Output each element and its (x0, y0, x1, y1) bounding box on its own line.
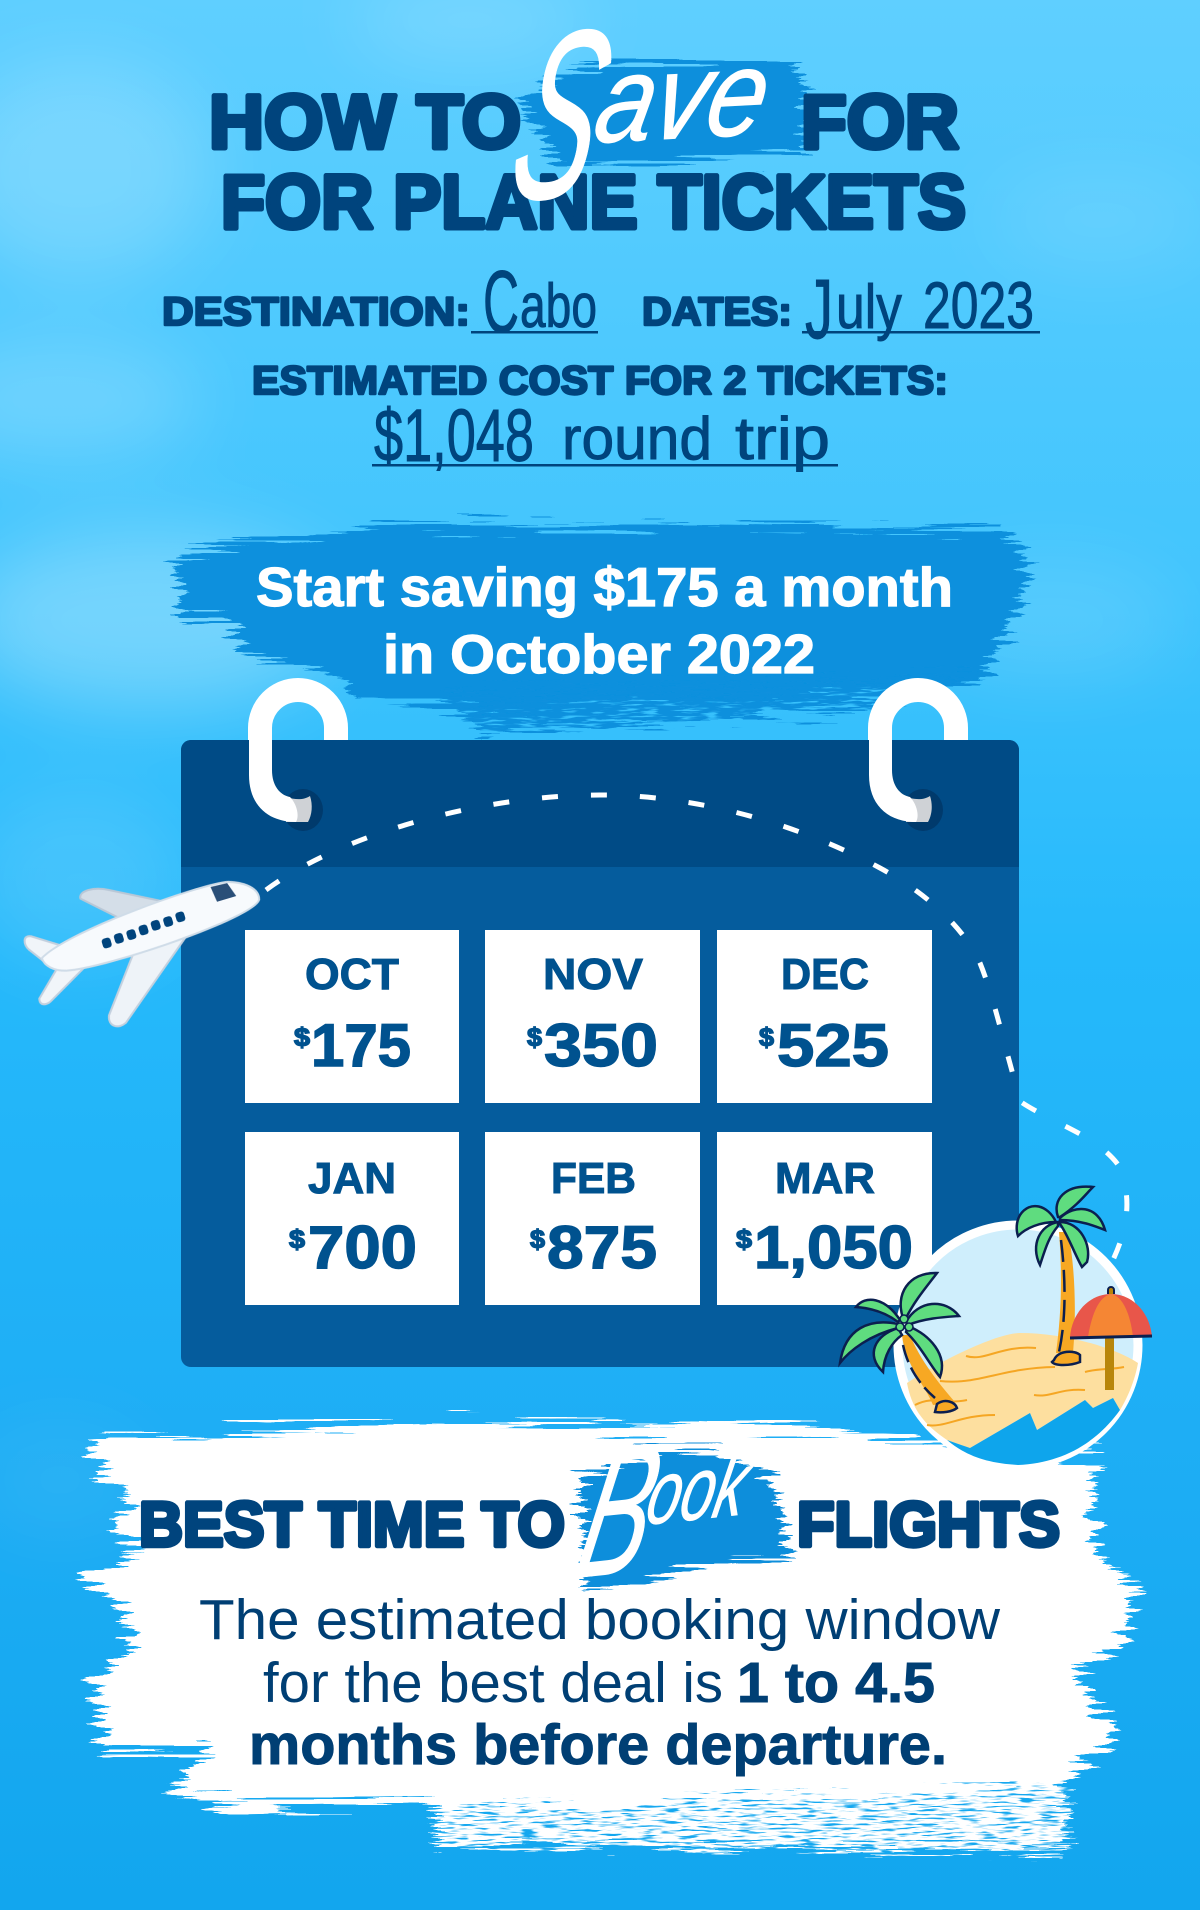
calendar header (181, 740, 1019, 867)
card: MAR: 1,050 (754, 1214, 913, 1281)
card: DEC: $ (759, 1022, 775, 1052)
fuselage (36, 873, 265, 980)
palm right (1017, 1187, 1105, 1365)
ring left (249, 735, 323, 831)
card: MAR: MAR (775, 1154, 875, 1203)
dates value: 2023 (923, 268, 1034, 342)
body text line 3 bold: months before departure. (249, 1713, 947, 1777)
destination value: abo (520, 272, 597, 341)
far wing (79, 871, 164, 929)
title (209, 0, 966, 252)
beach circle (898, 1225, 1138, 1465)
body text line 2 regular: for the best deal is (263, 1651, 723, 1715)
title line 1 left: HOW TO (209, 80, 521, 165)
dates value: uly (836, 273, 902, 342)
card: MAR (717, 1132, 932, 1305)
card: NOV (485, 930, 700, 1103)
white brush stroke (84, 1423, 1140, 1807)
dates value: J (805, 262, 833, 356)
icon: airplane (13, 844, 283, 1046)
sand ripples (915, 1348, 1124, 1425)
near wing (91, 929, 211, 1028)
card: DEC: DEC (781, 950, 869, 999)
umbrella (1070, 1287, 1152, 1390)
card: OCT: OCT (305, 950, 399, 999)
card: FEB: FEB (551, 1154, 636, 1203)
heading right: FLIGHTS (797, 1490, 1060, 1560)
card: FEB (485, 1132, 700, 1305)
cost underline (372, 464, 838, 466)
script word Book: B (563, 1402, 677, 1618)
heading left: BEST TIME TO (139, 1490, 565, 1560)
trip details (162, 252, 1040, 477)
destination value: C (483, 252, 519, 351)
destination label: DESTINATION: (162, 290, 470, 334)
water (947, 1398, 1120, 1465)
flight path arrow (266, 795, 1127, 1262)
brush stroke behind Book (580, 1447, 790, 1593)
script word Book: ook (639, 1433, 761, 1544)
cost value: round (562, 405, 712, 472)
title line 1 right: FOR (801, 80, 959, 165)
script word Save: ave (586, 23, 782, 169)
card: FEB: 875 (547, 1214, 657, 1281)
card: DEC: 525 (777, 1012, 889, 1079)
card: JAN: $ (289, 1224, 306, 1254)
cost label: ESTIMATED COST FOR 2 TICKETS: (252, 359, 948, 403)
card: OCT (245, 930, 459, 1103)
dry brush lower streaks (435, 1770, 1070, 1852)
card: MAR: $ (736, 1224, 753, 1254)
brush stroke behind Save (515, 60, 805, 165)
calendar body (181, 740, 1019, 1367)
card: DEC (717, 930, 932, 1103)
brush stroke banner (172, 524, 1028, 715)
cost value: trip (735, 405, 830, 472)
cost value: $1,048 (374, 394, 534, 477)
card: NOV: 350 (544, 1012, 658, 1079)
card: OCT: 175 (311, 1012, 411, 1079)
ring right (869, 735, 943, 831)
title line 2: FOR PLANE TICKETS (221, 160, 966, 245)
card: JAN: JAN (308, 1154, 396, 1203)
dates underline (802, 331, 1040, 334)
palm left (840, 1273, 959, 1412)
panel: best time to book (84, 1392, 1140, 1852)
dates label: DATES: (642, 290, 792, 334)
body text line 1: The estimated booking window (199, 1588, 1001, 1652)
panel: start saving banner (172, 524, 1028, 735)
card: NOV: NOV (543, 950, 644, 999)
card: OCT: $ (294, 1022, 311, 1052)
icon: beach scene (840, 1187, 1152, 1465)
ring backs (260, 690, 956, 745)
body text line 2 bold: 1 to 4.5 (737, 1651, 935, 1715)
cockpit (211, 881, 236, 902)
card: FEB: $ (530, 1224, 546, 1254)
banner text line 1: Start saving $175 a month (256, 556, 953, 618)
banner text line 2: in October 2022 (383, 623, 815, 685)
panel: calendar (181, 690, 1019, 1367)
card: JAN (245, 1132, 459, 1305)
card: JAN: 700 (308, 1214, 417, 1281)
tail fins (21, 923, 93, 1005)
banner lower dry streaks (440, 672, 990, 735)
card: NOV: $ (527, 1022, 543, 1052)
sand (907, 1333, 1138, 1448)
destination underline (471, 331, 598, 334)
windows (100, 911, 187, 949)
